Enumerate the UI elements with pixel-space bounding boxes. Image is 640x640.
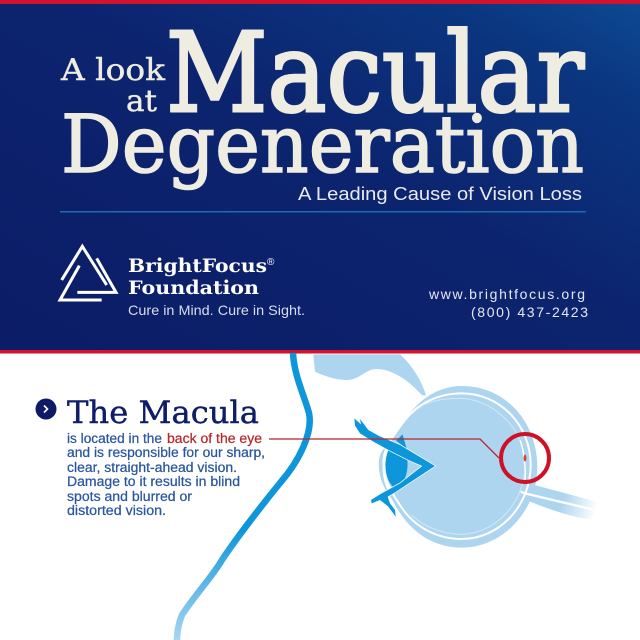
tear gland	[313, 354, 426, 396]
body text: Damage to it results in blind	[67, 474, 240, 489]
eyelids and iris	[354, 418, 435, 517]
subtitle: A Leading Cause of Vision Loss	[298, 184, 582, 204]
eye diagram	[313, 354, 597, 548]
section heading: The Macula	[67, 395, 259, 431]
title: A look at	[60, 53, 166, 119]
logo text: ®	[267, 257, 275, 268]
body text	[67, 431, 265, 518]
title: Macular: Macular	[166, 9, 584, 137]
callout: macula marker	[269, 434, 549, 482]
title: Degeneration: Degeneration	[61, 98, 584, 191]
contact details: (800) 437-2423	[471, 304, 588, 320]
divider line	[60, 211, 586, 212]
optic nerve line	[521, 492, 595, 510]
body text: and is responsible for our sharp,	[67, 445, 265, 460]
logo text: BrightFocus	[128, 255, 267, 277]
body text: is located in the	[67, 431, 162, 446]
lids	[354, 418, 435, 517]
logo text	[128, 255, 305, 318]
logo text: Cure in Mind. Cure in Sight.	[128, 302, 305, 318]
retina ring	[412, 398, 525, 534]
body text: back of the eye	[167, 431, 262, 446]
logo icon: triangles	[60, 246, 116, 300]
face profile line	[177, 353, 310, 640]
body text: distorted vision.	[67, 503, 166, 518]
body text: spots and blurred or	[67, 489, 193, 504]
iris	[386, 435, 407, 488]
logo text: Foundation	[128, 277, 259, 299]
header banner	[0, 0, 640, 354]
title: A look at: at	[126, 84, 157, 119]
body text: clear, straight-ahead vision.	[67, 460, 237, 475]
cornea white	[384, 445, 390, 492]
icon: bullet arrow	[36, 398, 56, 420]
contact details: www.brightfocus.org	[428, 286, 585, 302]
eye white ring	[383, 393, 531, 539]
eyeball outer	[379, 386, 537, 548]
optic nerve	[525, 483, 597, 520]
contact details	[428, 286, 588, 320]
title: A look at: A look	[60, 53, 166, 88]
